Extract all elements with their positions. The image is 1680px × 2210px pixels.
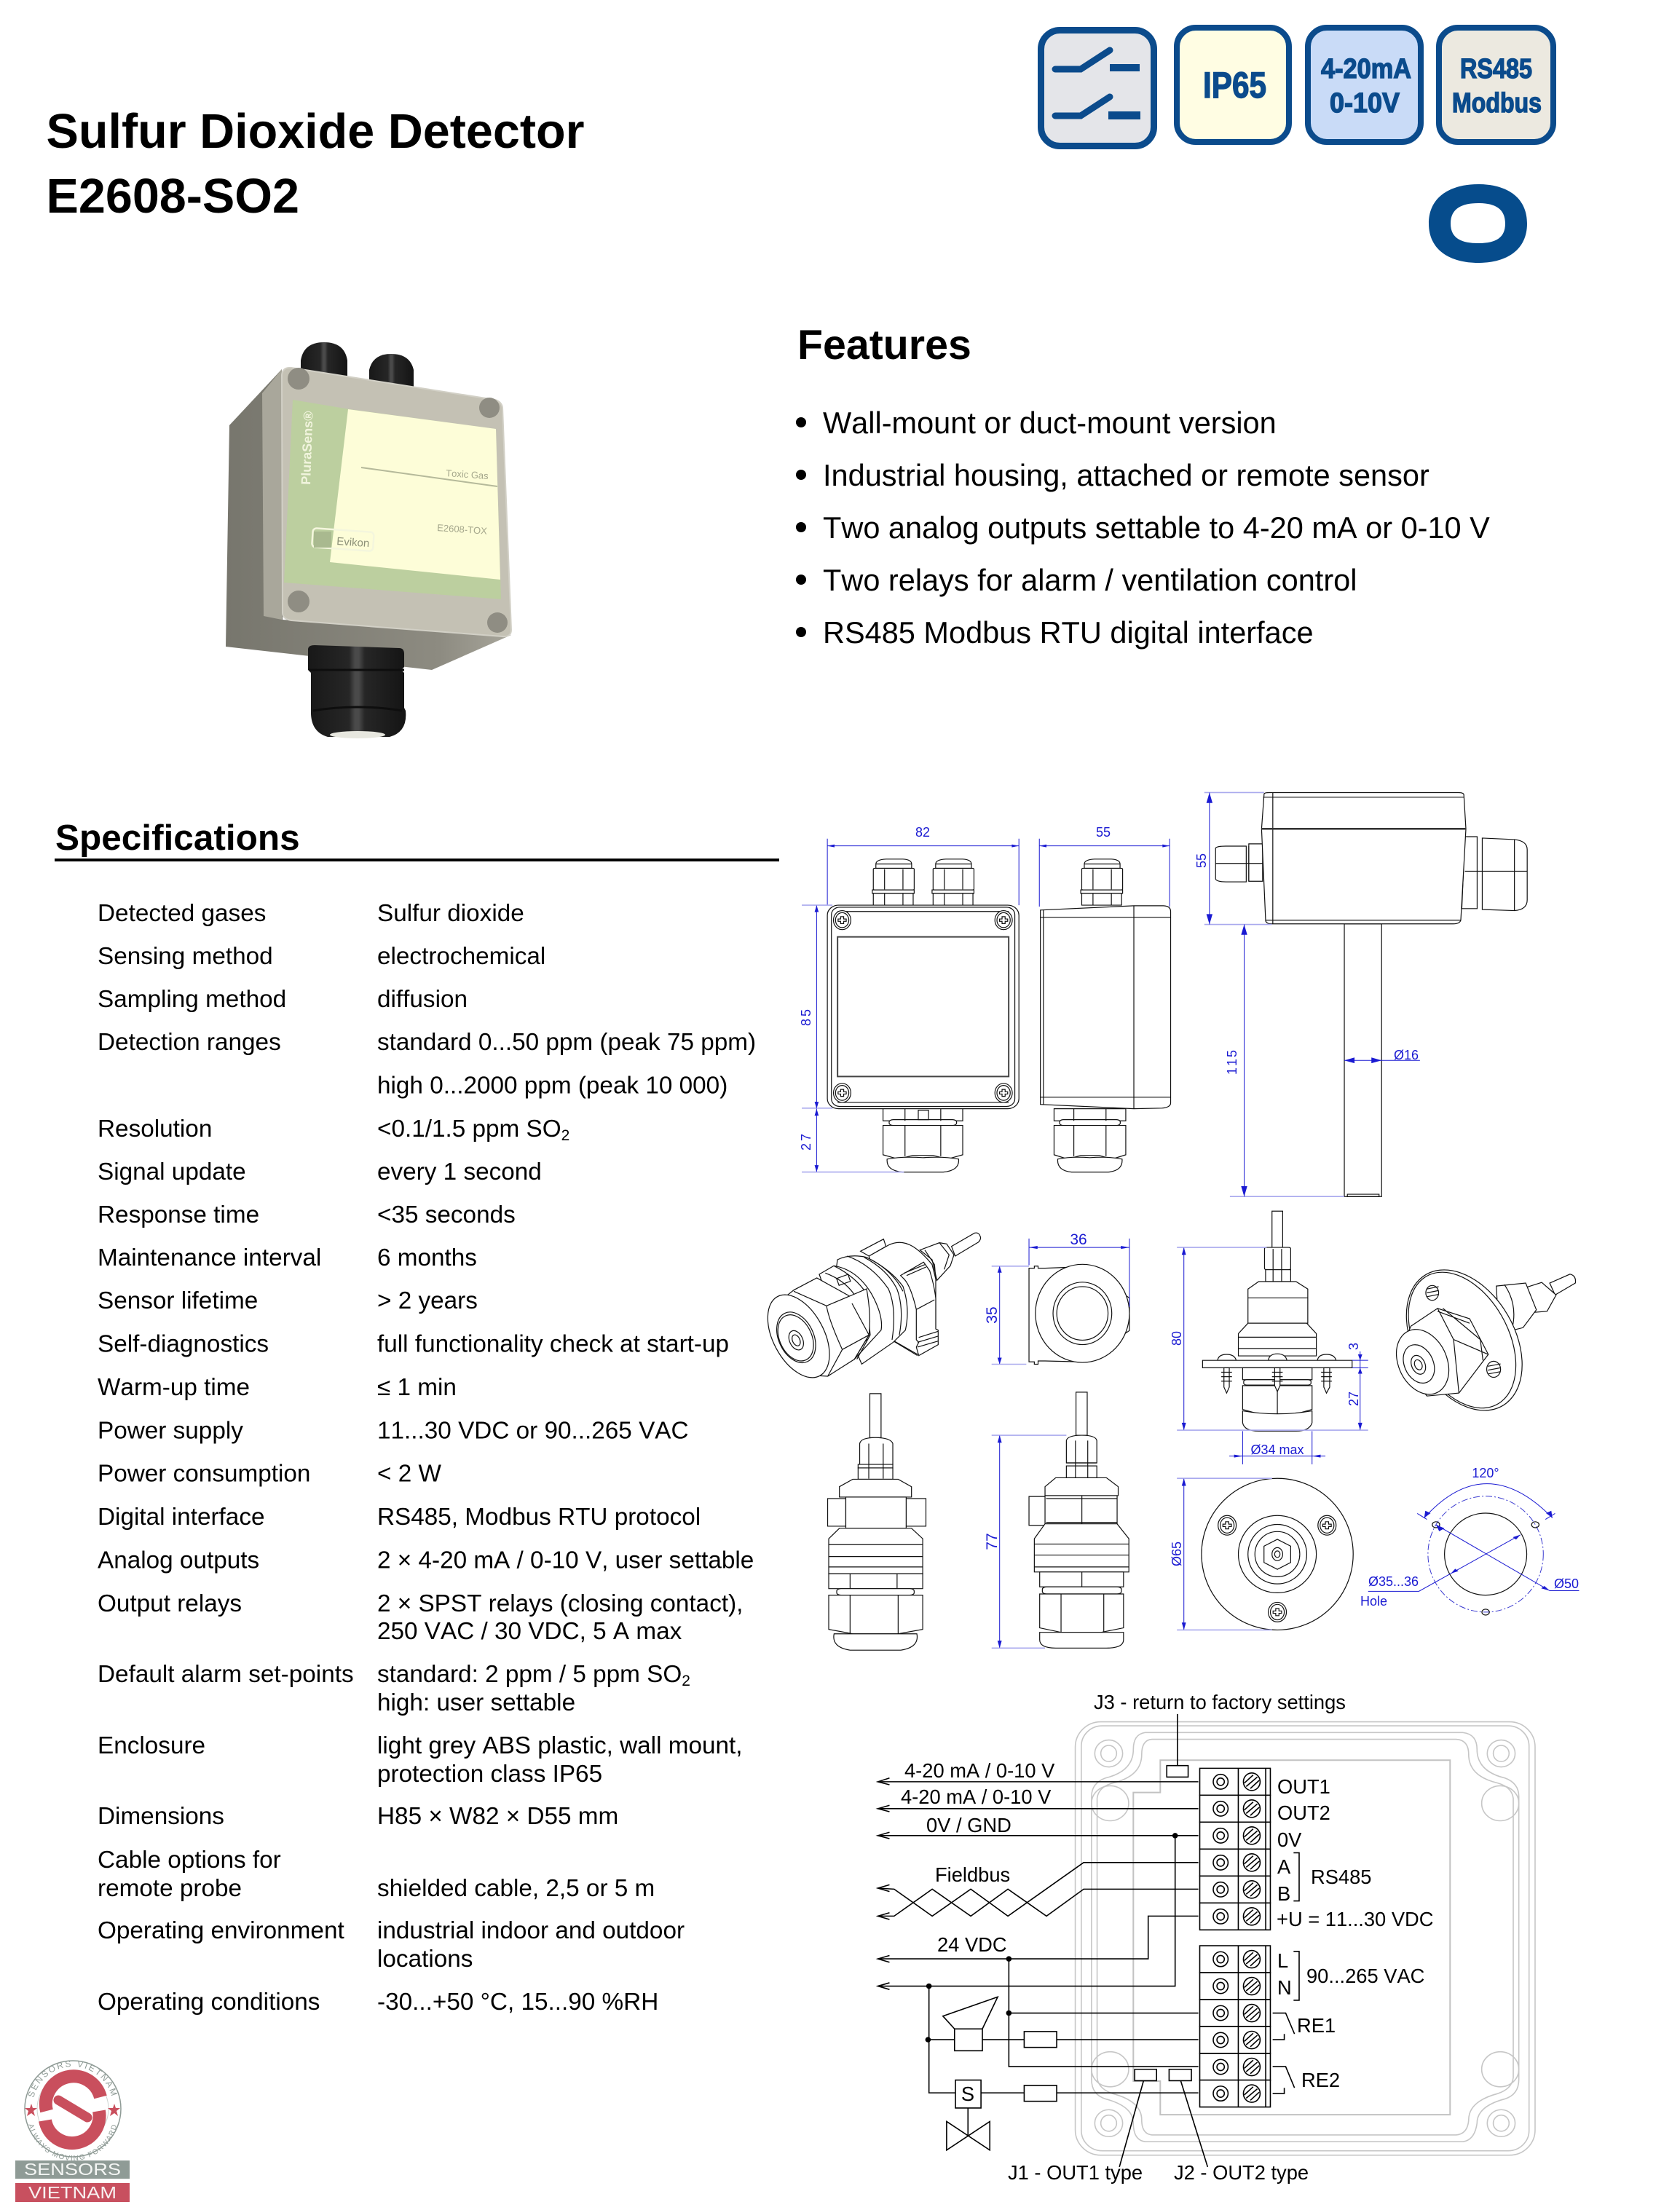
wiring diagram: 4-20 mA / 0-10 V <box>901 1785 1052 1808</box>
wiring diagram: +U = 11...30 VDC <box>1277 1908 1433 1930</box>
specifications table: Output relays <box>98 1590 242 1617</box>
dimension drawing: remote sensor probe: Ø35...36 <box>1368 1574 1419 1589</box>
dimension drawing: remote sensor probe: 120° <box>1472 1466 1499 1480</box>
flange front view <box>1177 1478 1353 1630</box>
product photo: detector enclosure: Toxic Gas <box>446 467 489 481</box>
side view <box>1041 859 1171 1172</box>
specifications table: Response time <box>98 1201 259 1228</box>
wiring diagram: Fieldbus <box>935 1863 1010 1886</box>
title <box>47 105 585 224</box>
wiring diagram: J2 - OUT2 type <box>1174 2161 1309 2184</box>
specifications table: Analog outputs <box>98 1547 259 1574</box>
heading: Features: Features <box>797 322 971 368</box>
specifications table: <0.1/1.5 ppm SO <box>377 1116 561 1143</box>
wiring diagram: RE2 <box>1301 2069 1340 2091</box>
specifications table: Detection ranges <box>98 1029 281 1056</box>
specifications table: industrial indoor and outdoor <box>377 1917 685 1944</box>
dimension drawing: remote sensor probe <box>755 1211 1579 1650</box>
specifications table: diffusion <box>377 986 468 1013</box>
wiring diagram: OUT1 <box>1277 1775 1330 1798</box>
specifications table: <35 seconds <box>377 1201 516 1228</box>
specifications table: standard 0...50 ppm (peak 75 ppm) <box>377 1029 756 1056</box>
probe side view A <box>828 1394 926 1650</box>
dimension drawing: remote sensor probe: 35 <box>984 1306 1001 1324</box>
specifications table: 2 × SPST relays (closing contact), <box>377 1590 743 1617</box>
wiring diagram: RE1 <box>1297 2014 1336 2037</box>
specifications table: Default alarm set-points <box>98 1661 354 1688</box>
specifications table: Digital interface <box>98 1504 265 1531</box>
specifications table <box>98 900 756 2016</box>
specifications table: RS485, Modbus RTU protocol <box>377 1504 701 1531</box>
specifications table: Self-diagnostics <box>98 1331 269 1357</box>
icon: RS485 Modbus badge: Modbus <box>1452 88 1542 119</box>
icon: analog output badge: 4-20mA <box>1321 54 1411 84</box>
specifications table: 6 months <box>377 1244 477 1271</box>
product photo: detector enclosure: E2608-TOX <box>437 522 488 537</box>
dimension drawing: wall-mount and duct-mount enclosure: Ø16 <box>1394 1048 1419 1062</box>
specifications table: Sulfur dioxide <box>377 900 524 927</box>
specifications table: shielded cable, 2,5 or 5 m <box>377 1875 655 1902</box>
specifications table: Sampling method <box>98 986 286 1013</box>
wiring diagram: 4-20 mA / 0-10 V <box>904 1759 1055 1782</box>
specifications table: 2 × 4-20 mA / 0-10 V, user settable <box>377 1547 754 1574</box>
specifications table: Resolution <box>98 1116 212 1143</box>
specifications table: 250 VAC / 30 VDC, 5 A max <box>377 1618 682 1645</box>
wiring diagram: 0V / GND <box>926 1814 1011 1836</box>
heading: Specifications <box>55 818 779 861</box>
specifications table: Dimensions <box>98 1803 224 1830</box>
wiring diagram <box>878 1691 1535 2184</box>
specifications table: > 2 years <box>377 1287 478 1314</box>
specifications table: full functionality check at start-up <box>377 1331 729 1357</box>
specifications table: Cable options for <box>98 1847 281 1874</box>
dimension drawing: remote sensor probe: Ø50 <box>1554 1576 1579 1591</box>
specifications table: H85 × W82 × D55 mm <box>377 1803 618 1830</box>
dimension drawing: remote sensor probe: 77 <box>984 1533 1001 1550</box>
specifications table: Operating environment <box>98 1917 344 1944</box>
dimension drawing: remote sensor probe: Ø34 max <box>1250 1443 1304 1457</box>
specifications table: 11...30 VDC or 90...265 VAC <box>377 1417 689 1445</box>
wiring diagram: 24 VDC <box>937 1933 1007 1956</box>
icon: analog output badge <box>1308 28 1421 142</box>
features list: Two relays for alarm / ventilation control <box>823 563 1357 597</box>
top view with 36 / 35 <box>992 1239 1129 1364</box>
icon: relay contacts <box>1041 31 1153 146</box>
icon: RS485 Modbus badge <box>1439 28 1553 142</box>
wiring diagram: S <box>961 2083 974 2105</box>
specifications table: Warm-up time <box>98 1374 250 1401</box>
product photo: detector enclosure: PluraSens® <box>299 411 316 485</box>
specifications table: Detected gases <box>98 900 266 927</box>
dimension drawing: wall-mount and duct-mount enclosure: 85 <box>799 1007 813 1026</box>
specifications table: light grey ABS plastic, wall mount, <box>377 1732 743 1759</box>
wiring diagram: B <box>1277 1882 1290 1905</box>
features list: Two analog outputs settable to 4-20 mA or 0-10 V <box>823 510 1490 545</box>
features list: Industrial housing, attached or remote sensor <box>823 458 1429 492</box>
dimension drawing: remote sensor probe: 27 <box>1346 1392 1361 1406</box>
product photo: detector enclosure: Evikon <box>336 535 370 550</box>
front view <box>827 859 1019 1172</box>
icon: RS485 Modbus badge: RS485 <box>1460 54 1532 84</box>
specifications table: high 0...2000 ppm (peak 10 000) <box>377 1072 727 1100</box>
dimension drawing: remote sensor probe: Hole <box>1360 1594 1387 1609</box>
dimension drawing: wall-mount and duct-mount enclosure: 82 <box>915 825 930 840</box>
logo: Sensors Vietnam: SENSORS <box>24 2160 121 2179</box>
dimension drawing: wall-mount and duct-mount enclosure: 55 <box>1096 825 1111 840</box>
icon: IP65 badge <box>1177 28 1289 142</box>
wiring diagram: J3 - return to factory settings <box>1094 1691 1346 1713</box>
specifications table: standard: 2 ppm / 5 ppm SO <box>377 1661 682 1688</box>
drilling template <box>1368 1484 1579 1615</box>
specifications table: 2 <box>561 1127 569 1144</box>
specifications table: electrochemical <box>377 943 545 970</box>
logo: Sensors Vietnam: ALWAYS MOVING FORWARD <box>28 2125 117 2160</box>
wiring diagram: OUT2 <box>1277 1801 1330 1824</box>
probe side view B <box>992 1392 1129 1648</box>
loads: horn, solenoid, valve, fuses <box>943 1997 1057 2150</box>
specifications table: Sensor lifetime <box>98 1287 258 1314</box>
specifications table: remote probe <box>98 1875 242 1902</box>
specifications table: -30...+50 °C, 15...90 %RH <box>377 1989 658 2016</box>
dimension drawing: remote sensor probe: 3 <box>1346 1343 1361 1350</box>
dimension drawing: remote sensor probe: 36 <box>1070 1231 1087 1248</box>
wiring diagram: L <box>1277 1949 1288 1972</box>
wiring diagram: 90...265 VAC <box>1306 1965 1424 1987</box>
dimension drawing: remote sensor probe: 80 <box>1170 1331 1184 1346</box>
dimension drawing: remote sensor probe: Ø65 <box>1170 1542 1184 1566</box>
logo: Sensors Vietnam: SENSORS VIETNAM <box>28 2061 117 2097</box>
icon: blue O mark <box>1429 184 1527 263</box>
features list: RS485 Modbus RTU digital interface <box>823 615 1314 650</box>
duct-mount side view <box>1177 1211 1368 1464</box>
specifications table: Enclosure <box>98 1732 205 1759</box>
dimension drawing: wall-mount and duct-mount enclosure <box>799 772 1527 1196</box>
logo: Sensors Vietnam: VIETNAM <box>28 2183 117 2202</box>
specifications table: Maintenance interval <box>98 1244 321 1271</box>
wiring diagram: 0V <box>1277 1828 1302 1851</box>
specifications table: < 2 W <box>377 1461 441 1487</box>
specifications table: Signal update <box>98 1159 246 1185</box>
dimension lines <box>802 772 1420 1196</box>
jumpers and brackets <box>1119 1714 1299 2167</box>
specifications table: Operating conditions <box>98 1989 320 2016</box>
specifications table: Sensing method <box>98 943 273 970</box>
3D flange view, right <box>1387 1264 1576 1416</box>
features list: Wall-mount or duct-mount version <box>823 406 1277 440</box>
specifications table: protection class IP65 <box>377 1761 602 1788</box>
title: E2608-SO2 <box>47 170 299 224</box>
heading: Specifications: Specifications <box>55 818 300 858</box>
specifications table: high: user settable <box>377 1689 575 1716</box>
features list <box>796 406 1490 650</box>
product photo: detector enclosure <box>226 342 511 738</box>
title: Sulfur Dioxide Detector <box>47 105 585 159</box>
specifications table: every 1 second <box>377 1159 542 1185</box>
dimension drawing: wall-mount and duct-mount enclosure: 55 <box>1194 853 1209 868</box>
specifications table: Power supply <box>98 1417 243 1445</box>
icon: analog output badge: 0-10V <box>1330 88 1400 119</box>
logo: Sensors Vietnam <box>15 2060 130 2202</box>
3D probe view, left <box>755 1233 981 1388</box>
specifications table: Power consumption <box>98 1461 310 1487</box>
wires <box>878 1778 1199 2136</box>
dimension drawing: wall-mount and duct-mount enclosure: 27 <box>799 1132 813 1151</box>
specifications table: 2 <box>682 1673 690 1689</box>
wiring diagram: N <box>1277 1976 1292 1999</box>
terminal blocks <box>1200 1768 1270 2107</box>
enclosure outline <box>1076 1722 1535 2155</box>
specifications table: locations <box>377 1946 473 1973</box>
duct view <box>1215 792 1527 1196</box>
wiring diagram: A <box>1277 1855 1291 1878</box>
wiring diagram: J1 - OUT1 type <box>1008 2161 1143 2184</box>
wiring diagram: RS485 <box>1311 1866 1371 1888</box>
dimension drawing: wall-mount and duct-mount enclosure: 115 <box>1225 1049 1239 1075</box>
icon: IP65 badge: IP65 <box>1203 65 1266 106</box>
specifications table: ≤ 1 min <box>377 1374 457 1401</box>
